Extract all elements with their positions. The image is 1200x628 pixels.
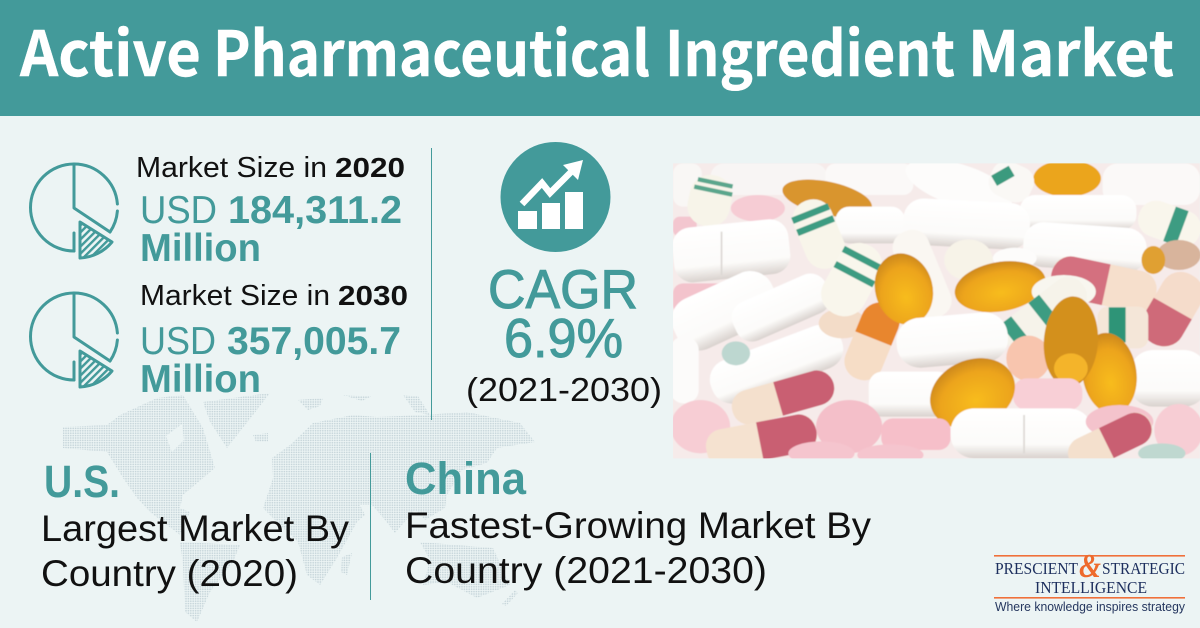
callout: U.S. largest market: Country (2020): [41, 553, 298, 594]
pink cream capsule right: [1050, 256, 1157, 310]
text: CAGR: [466, 258, 662, 408]
text: CAGR: 6.9%: [504, 307, 623, 369]
title banner: [0, 0, 1200, 116]
icon: pie chart 2030: [31, 293, 117, 387]
text: market size 2030: Million: [140, 358, 261, 401]
text: market size 2030: [140, 280, 408, 401]
white capsule with green band: [1003, 294, 1053, 342]
text: market size 2020: 184,311.2: [228, 189, 402, 232]
title: Market: [968, 4, 1174, 94]
text: market size 2020: [136, 152, 405, 270]
lower pink and capsules: [671, 400, 730, 453]
long white centre: [893, 234, 952, 317]
logo: Prescient & Strategic Intelligence: PRESCIENT: [995, 559, 1079, 578]
striped capsule centre: [822, 242, 882, 317]
text: market size 2020: USD: [140, 189, 217, 232]
logo: Prescient & Strategic Intelligence: Where knowledge inspires strategy: [995, 600, 1186, 614]
lower white: [869, 372, 952, 417]
callout: China fastest-growing market: Fastest-Growing Market By: [405, 505, 872, 546]
callout: U.S. largest market: U.S.: [44, 456, 120, 507]
lower right white tablet: [1130, 350, 1200, 407]
text: market size 2030: 357,005.7: [227, 320, 401, 363]
callout: China fastest-growing market: [405, 453, 872, 591]
white tablets left: [673, 270, 773, 351]
capsule striped top left: [688, 176, 734, 225]
callout: China fastest-growing market: China: [405, 453, 527, 504]
logo: Prescient & Strategic Intelligence: INTELLIGENCE: [1035, 578, 1147, 597]
text: market size 2030: USD: [140, 320, 216, 363]
title: Ingredient: [665, 4, 955, 94]
world map dotted background: [63, 393, 535, 622]
peach orange capsule: [844, 302, 900, 380]
text: market size 2020: Market Size in: [136, 152, 327, 184]
icon: pie chart 2020: [31, 164, 117, 258]
text: market size 2020: 2020: [335, 152, 405, 183]
white tablet centre: [894, 310, 1010, 370]
text: market size 2030: 2030: [338, 280, 408, 311]
softgels right: [1082, 332, 1138, 409]
softgel 2: [954, 260, 1046, 313]
tablets mid: [836, 207, 905, 243]
logo: Prescient & Strategic Intelligence: STRATEGIC: [1102, 559, 1185, 578]
photo: assorted pills: [673, 163, 1200, 458]
text: market size 2020: Million: [140, 227, 261, 270]
callout: China fastest-growing market: Country (2021-2030): [405, 550, 767, 591]
text: CAGR: CAGR: [488, 258, 638, 320]
icon: growth chart circle: [500, 142, 610, 252]
logo: Prescient & Strategic Intelligence: &: [1079, 548, 1101, 585]
back row: [711, 163, 827, 195]
callout: U.S. largest market: [41, 456, 350, 594]
title: [19, 4, 1174, 94]
logo: Prescient & Strategic Intelligence: [994, 548, 1186, 614]
text: market size 2030: Market Size in: [140, 280, 330, 312]
title: Pharmaceutical: [213, 4, 650, 94]
text: CAGR: (2021-2030): [466, 371, 662, 408]
callout: U.S. largest market: Largest Market By: [41, 508, 350, 549]
pink tablet stack: [1013, 378, 1082, 410]
title: Active: [19, 4, 201, 94]
softgel 1: [874, 252, 934, 325]
